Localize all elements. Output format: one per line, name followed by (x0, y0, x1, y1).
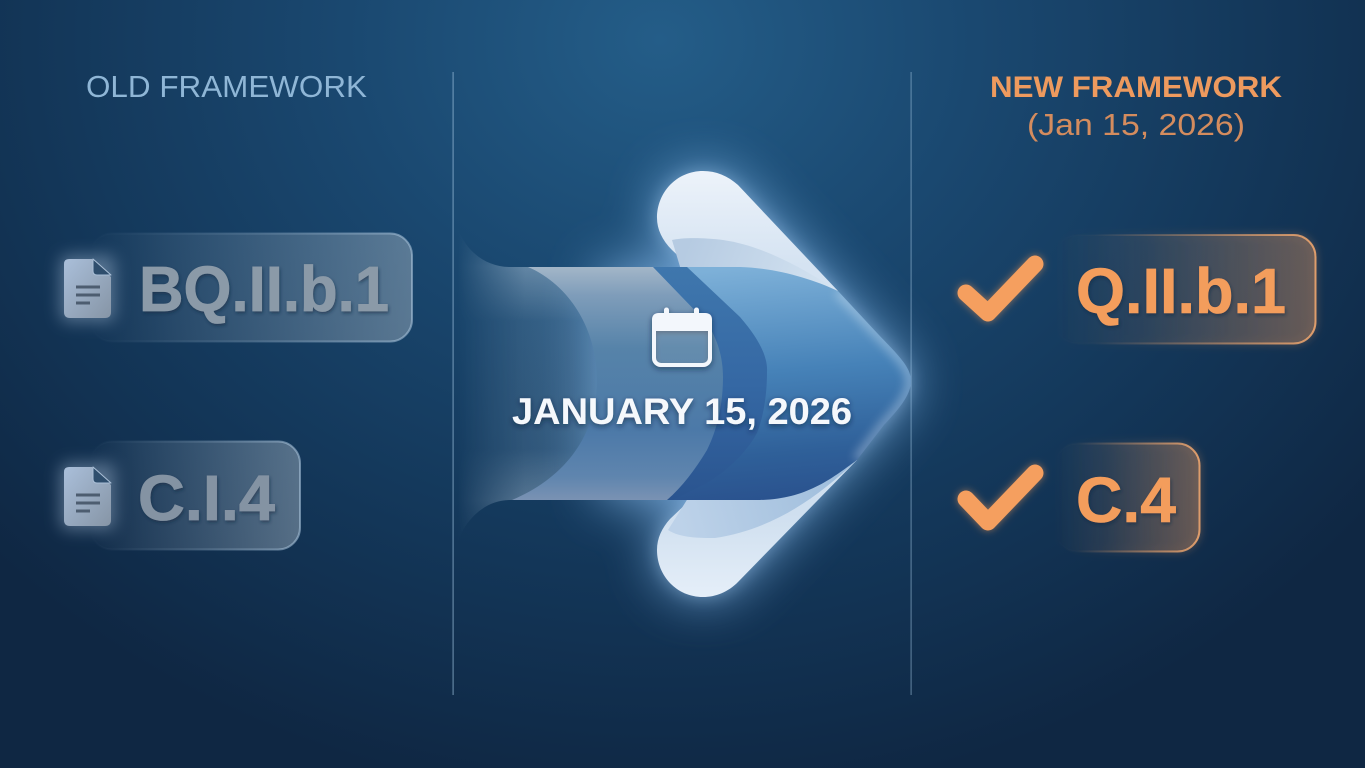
heading: new framework (990, 71, 1282, 142)
icon: document (60, 463, 115, 530)
heading: new framework: NEW FRAMEWORK (990, 71, 1282, 104)
tail band top and bottom sheen (467, 252, 582, 514)
arrow head (657, 171, 857, 597)
old code: BQ.II.b.1 (60, 234, 412, 342)
arrow body (600, 267, 911, 500)
arrow body dark chevron (620, 267, 767, 500)
arrow tight glow (657, 171, 911, 597)
tail band lighter section (512, 267, 723, 500)
tail band (457, 225, 640, 545)
heading: old framework: OLD FRAMEWORK (86, 69, 367, 104)
code text: Q.II.b.1: Q.II.b.1 (1076, 255, 1286, 327)
icon: calendar (652, 310, 712, 365)
arrow head inner fold bottom (668, 460, 857, 538)
icon: check mark (966, 473, 1035, 522)
old code: C.I.4 (60, 442, 300, 550)
divider: right (910, 72, 912, 695)
arrow tip highlight (838, 291, 911, 460)
code text: BQ.II.b.1: BQ.II.b.1 (139, 253, 389, 325)
pill: BQ.II.b.1 (90, 234, 412, 342)
icon: document (60, 255, 115, 322)
pill: C.I.4 (90, 442, 300, 550)
divider: left (452, 72, 454, 695)
date label: JANUARY 15, 2026 (512, 391, 852, 432)
new code: C.4 (966, 444, 1200, 552)
heading: new framework: (Jan 15, 2026) (1027, 107, 1245, 142)
arrow head inner fold top (672, 238, 838, 300)
code text: C.I.4: C.I.4 (138, 462, 275, 534)
icon: check mark (966, 264, 1035, 313)
pill: C.4 (1055, 444, 1200, 552)
transition arrow (457, 171, 911, 597)
code text: C.4: C.4 (1076, 464, 1176, 536)
new code: Q.II.b.1 (966, 235, 1316, 344)
arrow glow (600, 171, 911, 597)
pill: Q.II.b.1 (1055, 235, 1316, 344)
